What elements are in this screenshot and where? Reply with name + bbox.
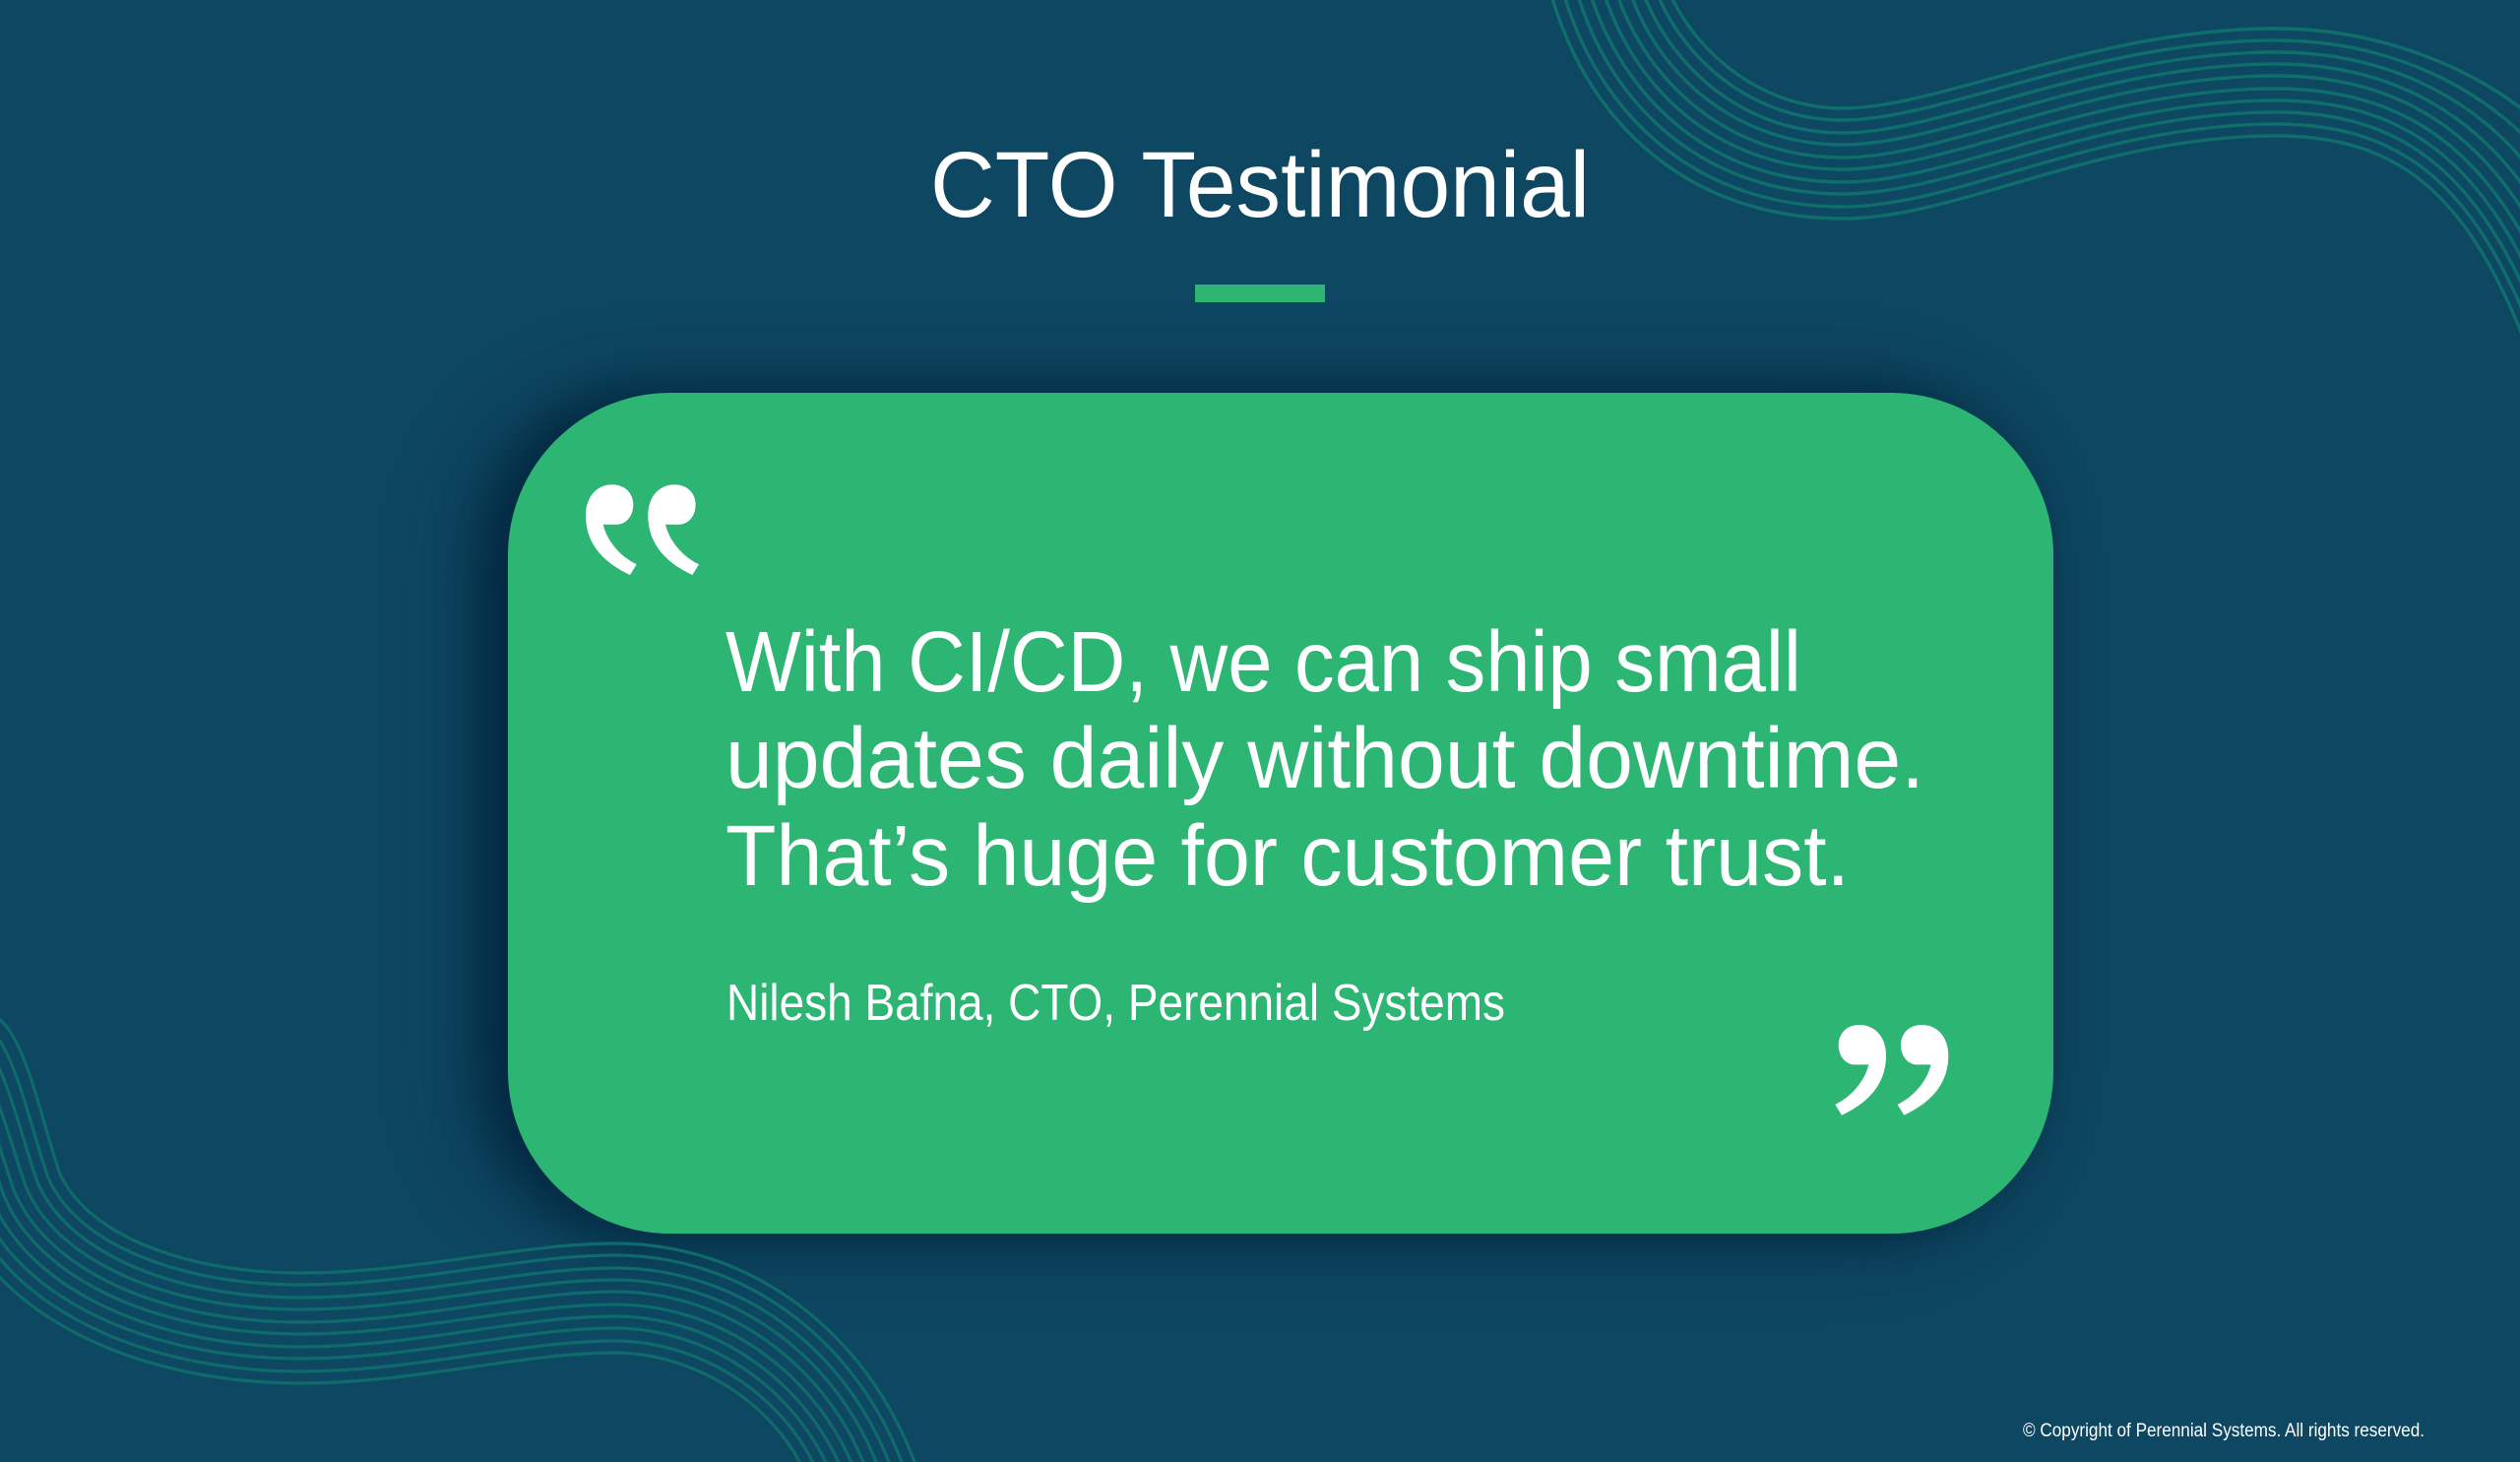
copyright footer: © Copyright of Perennial Systems. All rights reserved. [2023,1421,2425,1441]
icon: closing quotation marks [1835,1025,1948,1115]
attribution: Nilesh Bafna, CTO, Perennial Systems [726,975,1505,1032]
icon: opening quotation marks [586,484,699,575]
quote text [725,614,1924,904]
title: CTO Testimonial [930,133,1590,237]
quote text: That’s huge for customer trust. [725,808,1850,904]
quote text: updates daily without downtime. [725,711,1924,806]
decoration: bottom-left wave lines [0,1016,916,1462]
title accent bar [1195,285,1325,302]
decoration: top-right wave lines [1551,0,2520,342]
quote text: With CI/CD, we can ship small [725,614,1801,710]
panel: quote card [508,393,2053,1234]
